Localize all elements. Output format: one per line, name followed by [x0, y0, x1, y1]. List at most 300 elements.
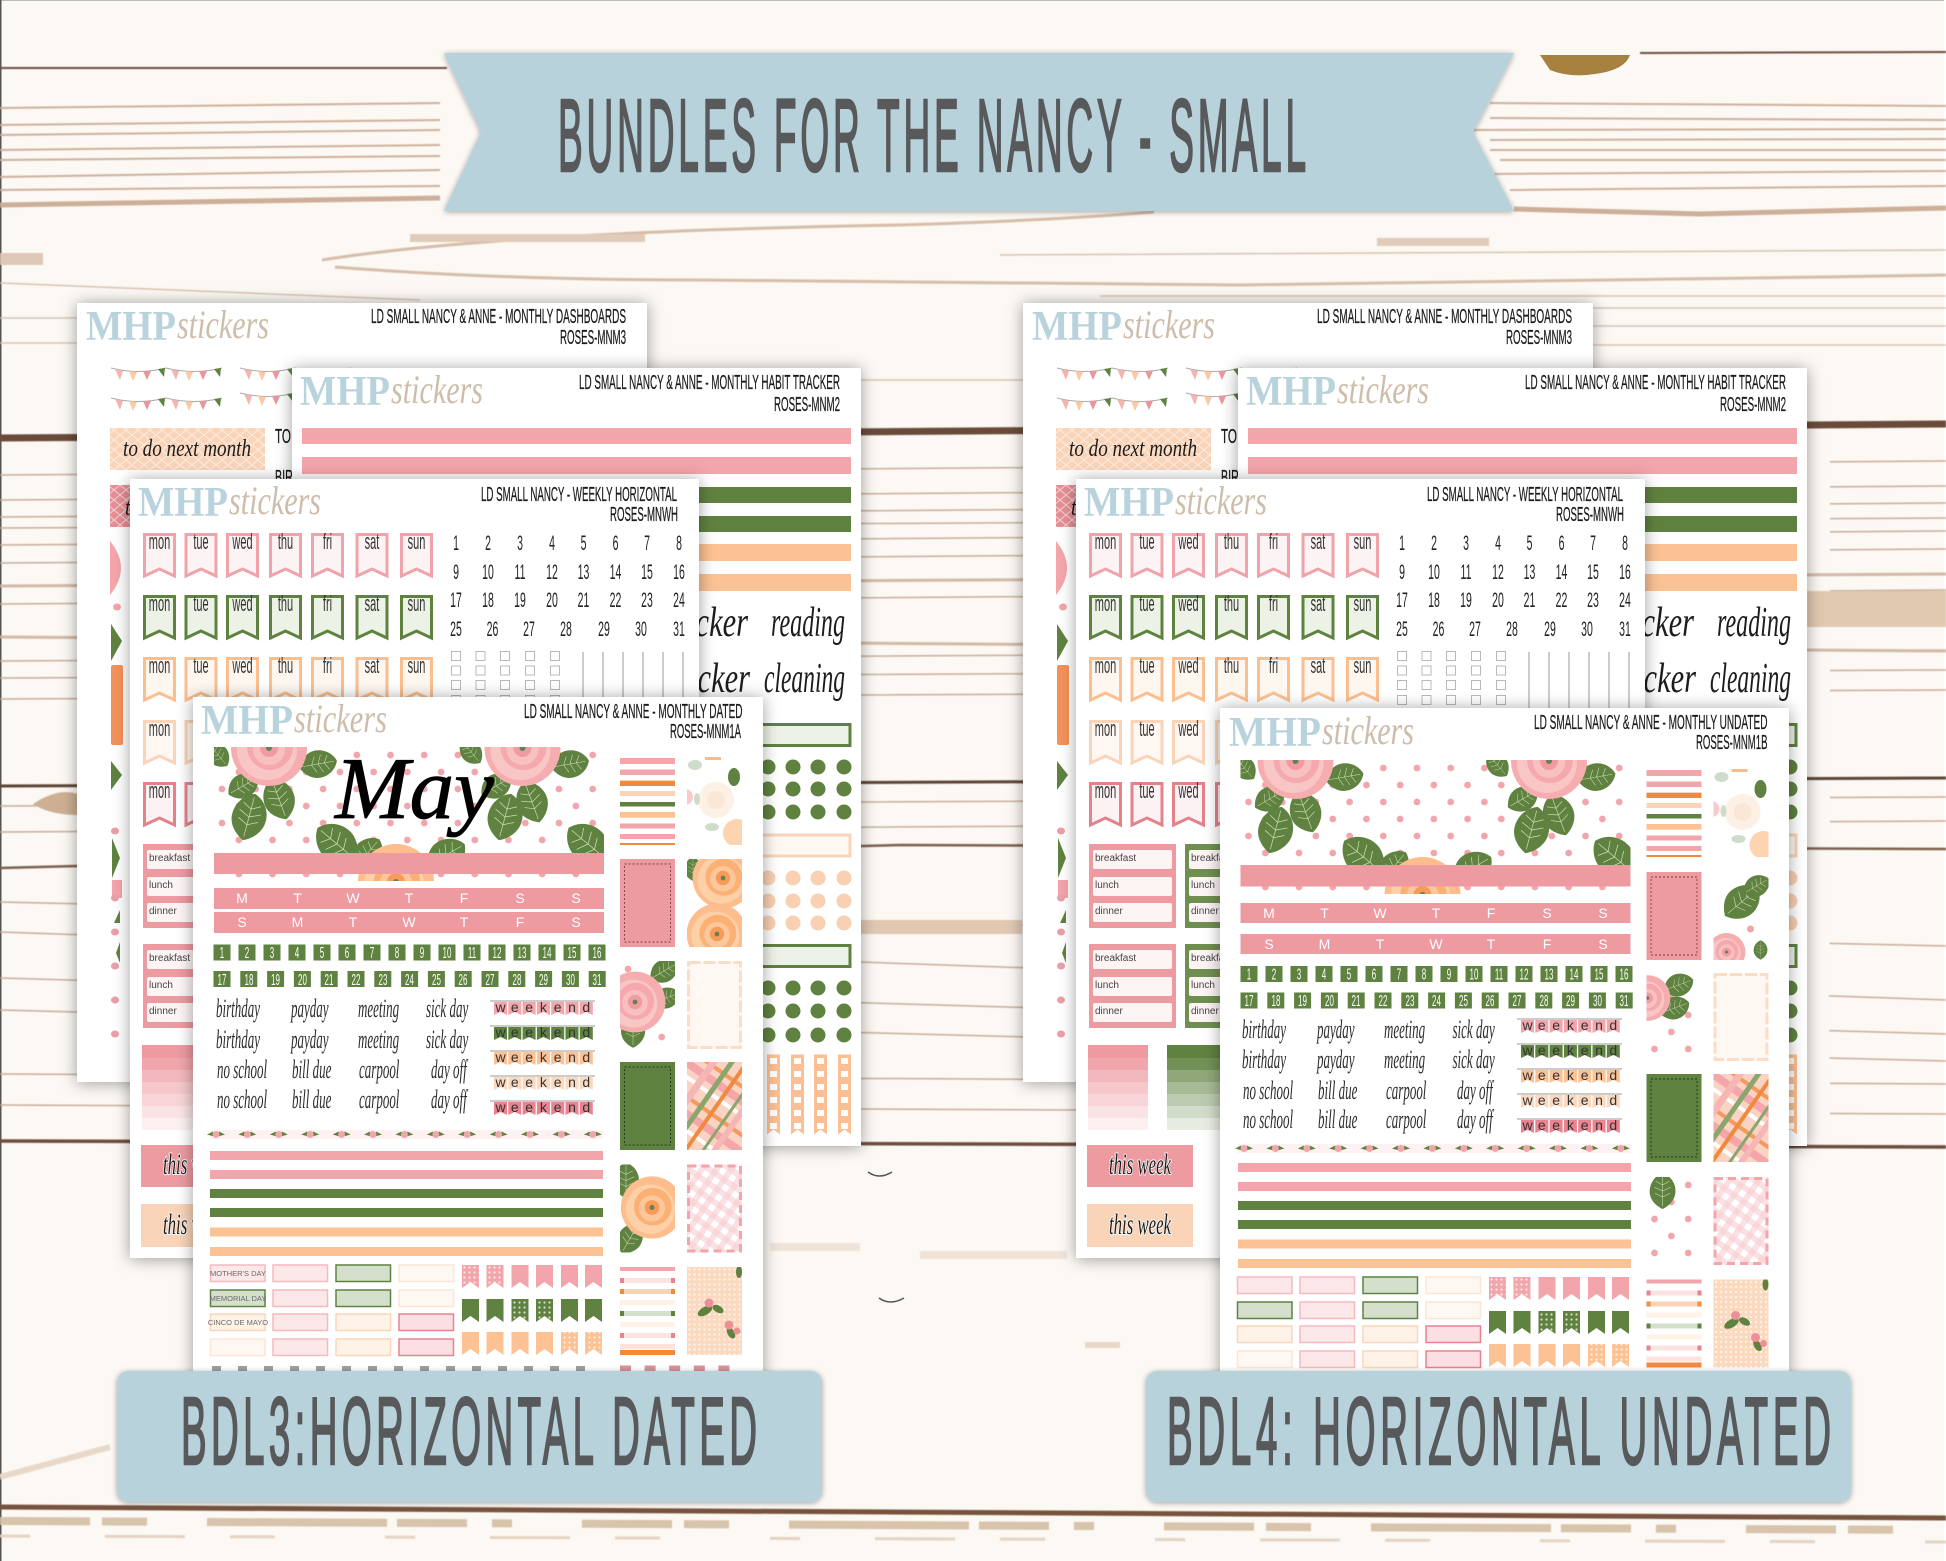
date tiles: 9 — [1447, 966, 1451, 983]
habit script words: tracker — [1606, 600, 1694, 646]
logo: stickers — [1322, 708, 1414, 753]
date numbers: 31 — [1619, 617, 1631, 641]
event script words: day off — [1457, 1077, 1495, 1105]
date numbers: 11 — [1461, 560, 1471, 584]
holiday label boxes: MOTHER'S DAY — [210, 1269, 266, 1278]
sheet heading: LD SMALL NANCY & ANNE - MONTHLY DATED — [524, 701, 742, 723]
date tiles: 18 — [1272, 992, 1280, 1010]
weekday flag labels: sat — [365, 653, 379, 678]
weekday flag labels: sat — [1311, 529, 1325, 554]
meal labels: breakfast — [149, 953, 190, 964]
event script words: sick day — [426, 995, 469, 1023]
date numbers: 16 — [673, 560, 685, 584]
mini flags — [1489, 1277, 1630, 1367]
date tiles: 1 — [220, 944, 224, 962]
event script words: no school — [1243, 1077, 1293, 1105]
panel: right dashboards sheet: ROSES-MNM3 — [1506, 327, 1572, 349]
date tiles: 23 — [1406, 992, 1414, 1010]
date numbers: 11 — [515, 560, 525, 584]
date numbers: 9 — [453, 560, 459, 584]
date numbers — [450, 531, 685, 641]
date numbers: 23 — [641, 588, 653, 612]
colour bars — [210, 1151, 603, 1256]
weekend banners: weekend — [1521, 1017, 1617, 1033]
logo: MHP — [300, 369, 390, 415]
event script words: carpool — [359, 1086, 400, 1114]
weekday flag labels: mon — [149, 653, 170, 678]
meal labels: lunch — [1191, 980, 1215, 991]
date numbers: 18 — [1428, 588, 1440, 612]
meal labels: lunch — [149, 980, 173, 991]
dashboard stickers text: BIRTHDAYS — [275, 467, 335, 489]
logo — [300, 367, 483, 415]
date numbers: 5 — [581, 531, 586, 555]
date numbers: 7 — [1590, 531, 1596, 555]
weekend banners: weekend — [494, 1099, 590, 1115]
event script words: payday — [290, 1026, 329, 1054]
date numbers: 18 — [482, 588, 494, 612]
event script words: no school — [217, 1056, 267, 1084]
sheet heading — [1317, 306, 1572, 349]
weekday flag labels: wed — [1178, 716, 1199, 741]
event script words: carpool — [1386, 1106, 1427, 1134]
dashboard stickers text — [1069, 426, 1281, 521]
date numbers — [1396, 531, 1631, 641]
date numbers: 29 — [598, 617, 610, 641]
weekday flag labels — [1095, 529, 1371, 803]
date numbers: 21 — [1524, 588, 1535, 612]
logo — [1084, 478, 1267, 526]
weekday flag labels: wed — [1178, 653, 1199, 678]
this week stickers — [163, 1148, 225, 1241]
meal labels: breakfast — [1191, 853, 1232, 864]
dashboard stickers text: to do this month — [1071, 495, 1199, 521]
rose washi strip — [1235, 1144, 1631, 1153]
date tiles: 31 — [1620, 992, 1628, 1010]
date tiles: 28 — [1540, 992, 1548, 1010]
weekday flag labels: sat — [365, 591, 379, 616]
dashboard stickers text: to do this month — [125, 495, 253, 521]
date tiles: 24 — [405, 971, 414, 989]
right column stickers — [1625, 769, 1848, 1368]
meal labels — [1095, 853, 1232, 1017]
logo: stickers — [1123, 302, 1215, 347]
date tiles: 28 — [513, 971, 521, 989]
weekday flag labels: sun — [408, 529, 425, 554]
weekend banners — [1517, 1017, 1622, 1133]
event script words: sick day — [1452, 1016, 1495, 1044]
meal labels: dinner — [1095, 1006, 1123, 1017]
date tiles: 23 — [379, 971, 387, 989]
weekday bars: SMTWTFS — [1264, 936, 1608, 952]
logo: MHP — [86, 304, 176, 350]
date tiles: 8 — [1422, 966, 1426, 983]
date tiles: 27 — [486, 971, 494, 989]
date tiles: 22 — [1379, 992, 1387, 1010]
weekday flag labels: fri — [323, 591, 332, 616]
date tiles: 10 — [1470, 966, 1478, 983]
date numbers: 6 — [613, 531, 618, 555]
colour bars — [1238, 1163, 1631, 1268]
date numbers: 25 — [450, 617, 462, 641]
panel: left habit tracker sheet — [292, 367, 861, 1146]
weekday flag labels: sat — [1311, 591, 1325, 616]
date numbers: 20 — [1492, 588, 1504, 612]
weekday flag labels: fri — [323, 529, 332, 554]
date tiles: 3 — [270, 944, 274, 962]
habit script words: cleaning — [1710, 656, 1791, 702]
event script words: carpool — [1386, 1077, 1427, 1105]
date numbers: 1 — [453, 531, 459, 555]
panel: right weekly horizontal sheet — [1076, 478, 1645, 1258]
weekday flag labels: wed — [232, 529, 253, 554]
date tiles: 12 — [493, 944, 501, 962]
date tiles: 22 — [352, 971, 360, 989]
event script words: meeting — [1384, 1046, 1425, 1074]
date numbers: 17 — [450, 588, 462, 612]
weekday flag labels: mon — [149, 716, 170, 741]
logo: MHP — [1229, 710, 1321, 756]
panel: right weekly horizontal sheet: ROSES-MNWH — [1556, 504, 1624, 526]
logo: stickers — [177, 302, 269, 347]
date numbers: 8 — [1622, 531, 1628, 555]
sheet heading — [1427, 484, 1624, 526]
event script words: birthday — [1242, 1046, 1287, 1074]
date tiles: 26 — [1486, 992, 1494, 1010]
meal labels: breakfast — [149, 853, 190, 864]
event script words: meeting — [358, 995, 399, 1023]
weekday flag labels: tue — [193, 529, 209, 554]
event script words: birthday — [216, 995, 261, 1023]
weekday flag labels: thu — [278, 529, 293, 554]
weekday flag labels: sat — [1311, 653, 1325, 678]
weekday flag labels: mon — [149, 778, 170, 803]
event script words: day off — [431, 1086, 469, 1114]
habit script words: cleaning — [764, 656, 845, 702]
weekend banners: weekend — [494, 1024, 590, 1040]
date tiles: 11 — [468, 944, 476, 962]
date numbers: 14 — [610, 560, 621, 584]
date tiles: 16 — [1620, 966, 1628, 983]
date tiles: 25 — [1459, 992, 1468, 1010]
label banner: BDL3 — [117, 1371, 822, 1502]
date numbers: 19 — [1460, 588, 1472, 612]
panel: left dashboards sheet — [77, 302, 647, 1082]
weekday flag labels: wed — [232, 653, 253, 678]
panel: left habit tracker sheet: LD SMALL NANCY & ANNE - MONTHLY HABIT TRACKER — [579, 372, 840, 394]
event script words: bill due — [1318, 1077, 1357, 1105]
date numbers: 12 — [546, 560, 558, 584]
date tiles: 8 — [395, 944, 399, 962]
weekday flag labels: tue — [1139, 778, 1155, 803]
logo — [1032, 302, 1215, 350]
date tiles: 6 — [345, 944, 349, 962]
sheet heading — [481, 484, 678, 526]
date tiles: 14 — [543, 944, 551, 962]
date numbers: 10 — [482, 560, 494, 584]
weekend banners: weekend — [1521, 1042, 1617, 1058]
weekday flag labels: mon — [1095, 778, 1116, 803]
date tiles: 30 — [1593, 992, 1602, 1010]
weekday flag labels: thu — [278, 653, 293, 678]
weekday flag labels: fri — [1269, 529, 1278, 554]
month title bar — [214, 853, 604, 874]
weekday flag labels: wed — [232, 778, 253, 803]
meal labels: dinner — [1191, 1006, 1219, 1017]
logo: stickers — [391, 367, 483, 412]
weekday flag labels: tue — [193, 653, 209, 678]
logo: MHP — [138, 480, 228, 526]
date numbers: 17 — [1396, 588, 1408, 612]
weekend banners: weekend — [494, 999, 590, 1015]
weekday flag labels: sun — [1354, 591, 1371, 616]
weekday flag labels: mon — [1095, 716, 1116, 741]
logo — [1246, 367, 1429, 415]
weekday flag labels: sun — [1354, 529, 1371, 554]
label banner: BDL4 — [1146, 1371, 1851, 1502]
date numbers: 4 — [549, 531, 555, 555]
holiday label boxes: CINCO DE MAYO — [208, 1318, 268, 1327]
date numbers: 24 — [1619, 588, 1631, 612]
date numbers: 27 — [1469, 617, 1481, 641]
habit script words — [1606, 600, 1791, 702]
weekday flag labels: tue — [193, 716, 209, 741]
sheet heading — [579, 372, 840, 416]
weekday bars — [214, 888, 604, 933]
panel: left dashboards sheet: ROSES-MNM3 — [560, 327, 626, 349]
habit script words — [660, 600, 845, 702]
weekday flag labels: mon — [1095, 653, 1116, 678]
panel: left weekly horizontal sheet: ROSES-MNWH — [610, 504, 678, 526]
date tiles: 7 — [370, 944, 374, 962]
mini flags — [462, 1265, 602, 1355]
event script words: payday — [1316, 1046, 1355, 1074]
date tiles: 10 — [443, 944, 451, 962]
date numbers: 3 — [517, 531, 523, 555]
date tiles: 20 — [1325, 992, 1334, 1010]
date tiles: 29 — [539, 971, 548, 989]
weekday flag labels: tue — [1139, 716, 1155, 741]
date tiles: 16 — [593, 944, 601, 962]
habit script words: reading — [1717, 600, 1791, 646]
dashboard stickers text: to do next month — [1069, 436, 1197, 462]
date numbers: 5 — [1527, 531, 1532, 555]
weekday flag labels: sat — [365, 529, 379, 554]
event script words: payday — [290, 995, 329, 1023]
weekday bars: SMTWTFS — [237, 914, 581, 930]
weekday flag labels: thu — [1224, 591, 1239, 616]
date tiles: 17 — [1245, 992, 1253, 1010]
icon: small stray arcs — [868, 1172, 904, 1302]
panel: right dashboards sheet — [1023, 302, 1593, 1082]
habit script words: tracker — [662, 656, 750, 702]
habit script words: tracker — [660, 600, 748, 646]
date tiles: 29 — [1566, 992, 1575, 1010]
this week stickers: this week — [1109, 1208, 1171, 1241]
event script words: no school — [1243, 1106, 1293, 1134]
panel: monthly undated sheet — [1220, 708, 1848, 1398]
date tiles: 4 — [295, 944, 299, 962]
date tiles — [1240, 966, 1633, 1010]
logo — [86, 302, 269, 350]
weekday flag labels: tue — [1139, 653, 1155, 678]
date numbers: 30 — [1581, 617, 1593, 641]
event script words: bill due — [292, 1056, 331, 1084]
weekday flag labels: mon — [1095, 529, 1116, 554]
holiday label boxes — [208, 1265, 454, 1356]
weekday flag labels: thu — [278, 591, 293, 616]
event script words: bill due — [1318, 1106, 1357, 1134]
date numbers: 28 — [1506, 617, 1518, 641]
date numbers: 30 — [635, 617, 647, 641]
meal labels: lunch — [1191, 880, 1215, 891]
weekday flag labels: fri — [323, 653, 332, 678]
date tiles: 13 — [518, 944, 526, 962]
date numbers: 9 — [1399, 560, 1405, 584]
title: BUNDLES FOR THE NANCY - SMALL — [558, 79, 1306, 194]
weekday flag labels: tue — [193, 591, 209, 616]
weekday flag labels: thu — [1224, 529, 1239, 554]
date tiles: 19 — [1298, 992, 1307, 1010]
date tiles: 17 — [218, 971, 226, 989]
date tiles: 15 — [568, 944, 576, 962]
panel: left weekly horizontal sheet — [130, 478, 699, 1258]
date tiles: 14 — [1570, 966, 1578, 983]
weekday flag labels — [149, 529, 425, 803]
logo — [201, 696, 387, 744]
date tiles: 15 — [1595, 966, 1603, 983]
date numbers: 14 — [1556, 560, 1567, 584]
date tiles: 1 — [1247, 966, 1251, 983]
holiday label boxes: MEMORIAL DAY — [210, 1294, 266, 1303]
sheet heading — [1534, 712, 1768, 754]
panel: left weekly horizontal sheet: LD SMALL NANCY - WEEKLY HORIZONTAL — [481, 484, 677, 506]
sheet heading — [524, 701, 742, 743]
rose washi strip — [207, 1130, 603, 1139]
event script words — [1242, 1016, 1495, 1134]
date tiles: 27 — [1513, 992, 1521, 1010]
event script words: meeting — [358, 1026, 399, 1054]
event script words: sick day — [426, 1026, 469, 1054]
date tiles: 12 — [1520, 966, 1528, 983]
weekday flag labels: wed — [1178, 778, 1199, 803]
logo: MHP — [1246, 369, 1336, 415]
dashboard stickers text: BIRTHDAYS — [1221, 467, 1281, 489]
logo: MHP — [1084, 480, 1174, 526]
meal labels: breakfast — [1095, 853, 1136, 864]
date tiles: 18 — [245, 971, 253, 989]
sheet heading — [1525, 372, 1786, 416]
event script words: payday — [1316, 1016, 1355, 1044]
panel: left habit tracker sheet: ROSES-MNM2 — [774, 394, 840, 416]
month title bar — [1240, 865, 1630, 886]
weekday flag labels: tue — [193, 778, 209, 803]
weekend banners: weekend — [1521, 1092, 1617, 1108]
weekday flag labels: wed — [232, 591, 253, 616]
date numbers: 3 — [1463, 531, 1469, 555]
event script words: day off — [1457, 1106, 1495, 1134]
date numbers: 28 — [560, 617, 572, 641]
date numbers: 26 — [487, 617, 498, 641]
meal labels — [149, 853, 190, 1017]
panel: right weekly horizontal sheet: LD SMALL NANCY - WEEKLY HORIZONTAL — [1427, 484, 1623, 506]
date numbers: 15 — [1587, 560, 1599, 584]
weekday bars: MTWTFSS — [1263, 905, 1608, 921]
dashboard stickers text: TO — [275, 426, 291, 448]
weekday bars — [1240, 903, 1630, 954]
weekday bars: MTWTFSS — [236, 890, 581, 906]
habit script words: reading — [771, 600, 845, 646]
date numbers: 25 — [1396, 617, 1408, 641]
date numbers: 26 — [1433, 617, 1444, 641]
event script words — [216, 995, 469, 1114]
date numbers: 2 — [1431, 531, 1437, 555]
date tiles: 5 — [320, 944, 324, 962]
weekday flag labels: wed — [1178, 591, 1199, 616]
sheet heading — [371, 306, 626, 349]
date tiles: 21 — [325, 971, 333, 989]
date tiles: 19 — [271, 971, 280, 989]
event script words: birthday — [1242, 1016, 1287, 1044]
date tiles: 7 — [1397, 966, 1401, 983]
date tiles: 25 — [432, 971, 441, 989]
date tiles: 21 — [1352, 992, 1360, 1010]
date numbers: 12 — [1492, 560, 1504, 584]
event script words: bill due — [292, 1086, 331, 1114]
weekday flag labels: fri — [1269, 591, 1278, 616]
panel: monthly dated sheet — [193, 696, 822, 1397]
meal labels: dinner — [149, 906, 177, 917]
date numbers: 8 — [676, 531, 682, 555]
event script words: birthday — [216, 1026, 261, 1054]
date tiles: 31 — [593, 971, 601, 989]
date numbers: 13 — [1524, 560, 1535, 584]
right column stickers — [605, 757, 822, 1355]
date tiles: 3 — [1297, 966, 1301, 983]
date tiles: 2 — [245, 944, 249, 962]
bottom icons row — [212, 1366, 742, 1372]
date numbers: 4 — [1495, 531, 1501, 555]
date numbers: 31 — [673, 617, 685, 641]
logo: MHP — [201, 698, 293, 744]
date numbers: 7 — [644, 531, 650, 555]
date numbers: 16 — [1619, 560, 1631, 584]
dashboard stickers text — [123, 426, 335, 521]
this week stickers: this week — [163, 1148, 225, 1181]
date tiles: 20 — [298, 971, 307, 989]
meal labels: lunch — [1095, 880, 1119, 891]
this week stickers: this week — [163, 1208, 225, 1241]
weekday flag labels: tue — [1139, 591, 1155, 616]
meal labels: dinner — [149, 1006, 177, 1017]
weekday flag labels: wed — [232, 716, 253, 741]
meal labels: lunch — [149, 880, 173, 891]
date numbers: 20 — [546, 588, 558, 612]
this week stickers — [1109, 1148, 1171, 1241]
habit script words: tracker — [1608, 656, 1696, 702]
meal labels: breakfast — [1095, 953, 1136, 964]
weekday flag labels: fri — [1269, 653, 1278, 678]
date numbers: 19 — [514, 588, 526, 612]
panel: monthly undated sheet: ROSES-MNM1B — [1696, 732, 1768, 754]
meal labels: lunch — [1095, 980, 1119, 991]
weekday flag labels: wed — [1178, 529, 1199, 554]
weekday flag labels: mon — [1095, 591, 1116, 616]
date tiles: 2 — [1272, 966, 1276, 983]
weekend banners: weekend — [1521, 1117, 1617, 1133]
weekday flag labels: mon — [149, 591, 170, 616]
event script words: sick day — [1452, 1046, 1495, 1074]
